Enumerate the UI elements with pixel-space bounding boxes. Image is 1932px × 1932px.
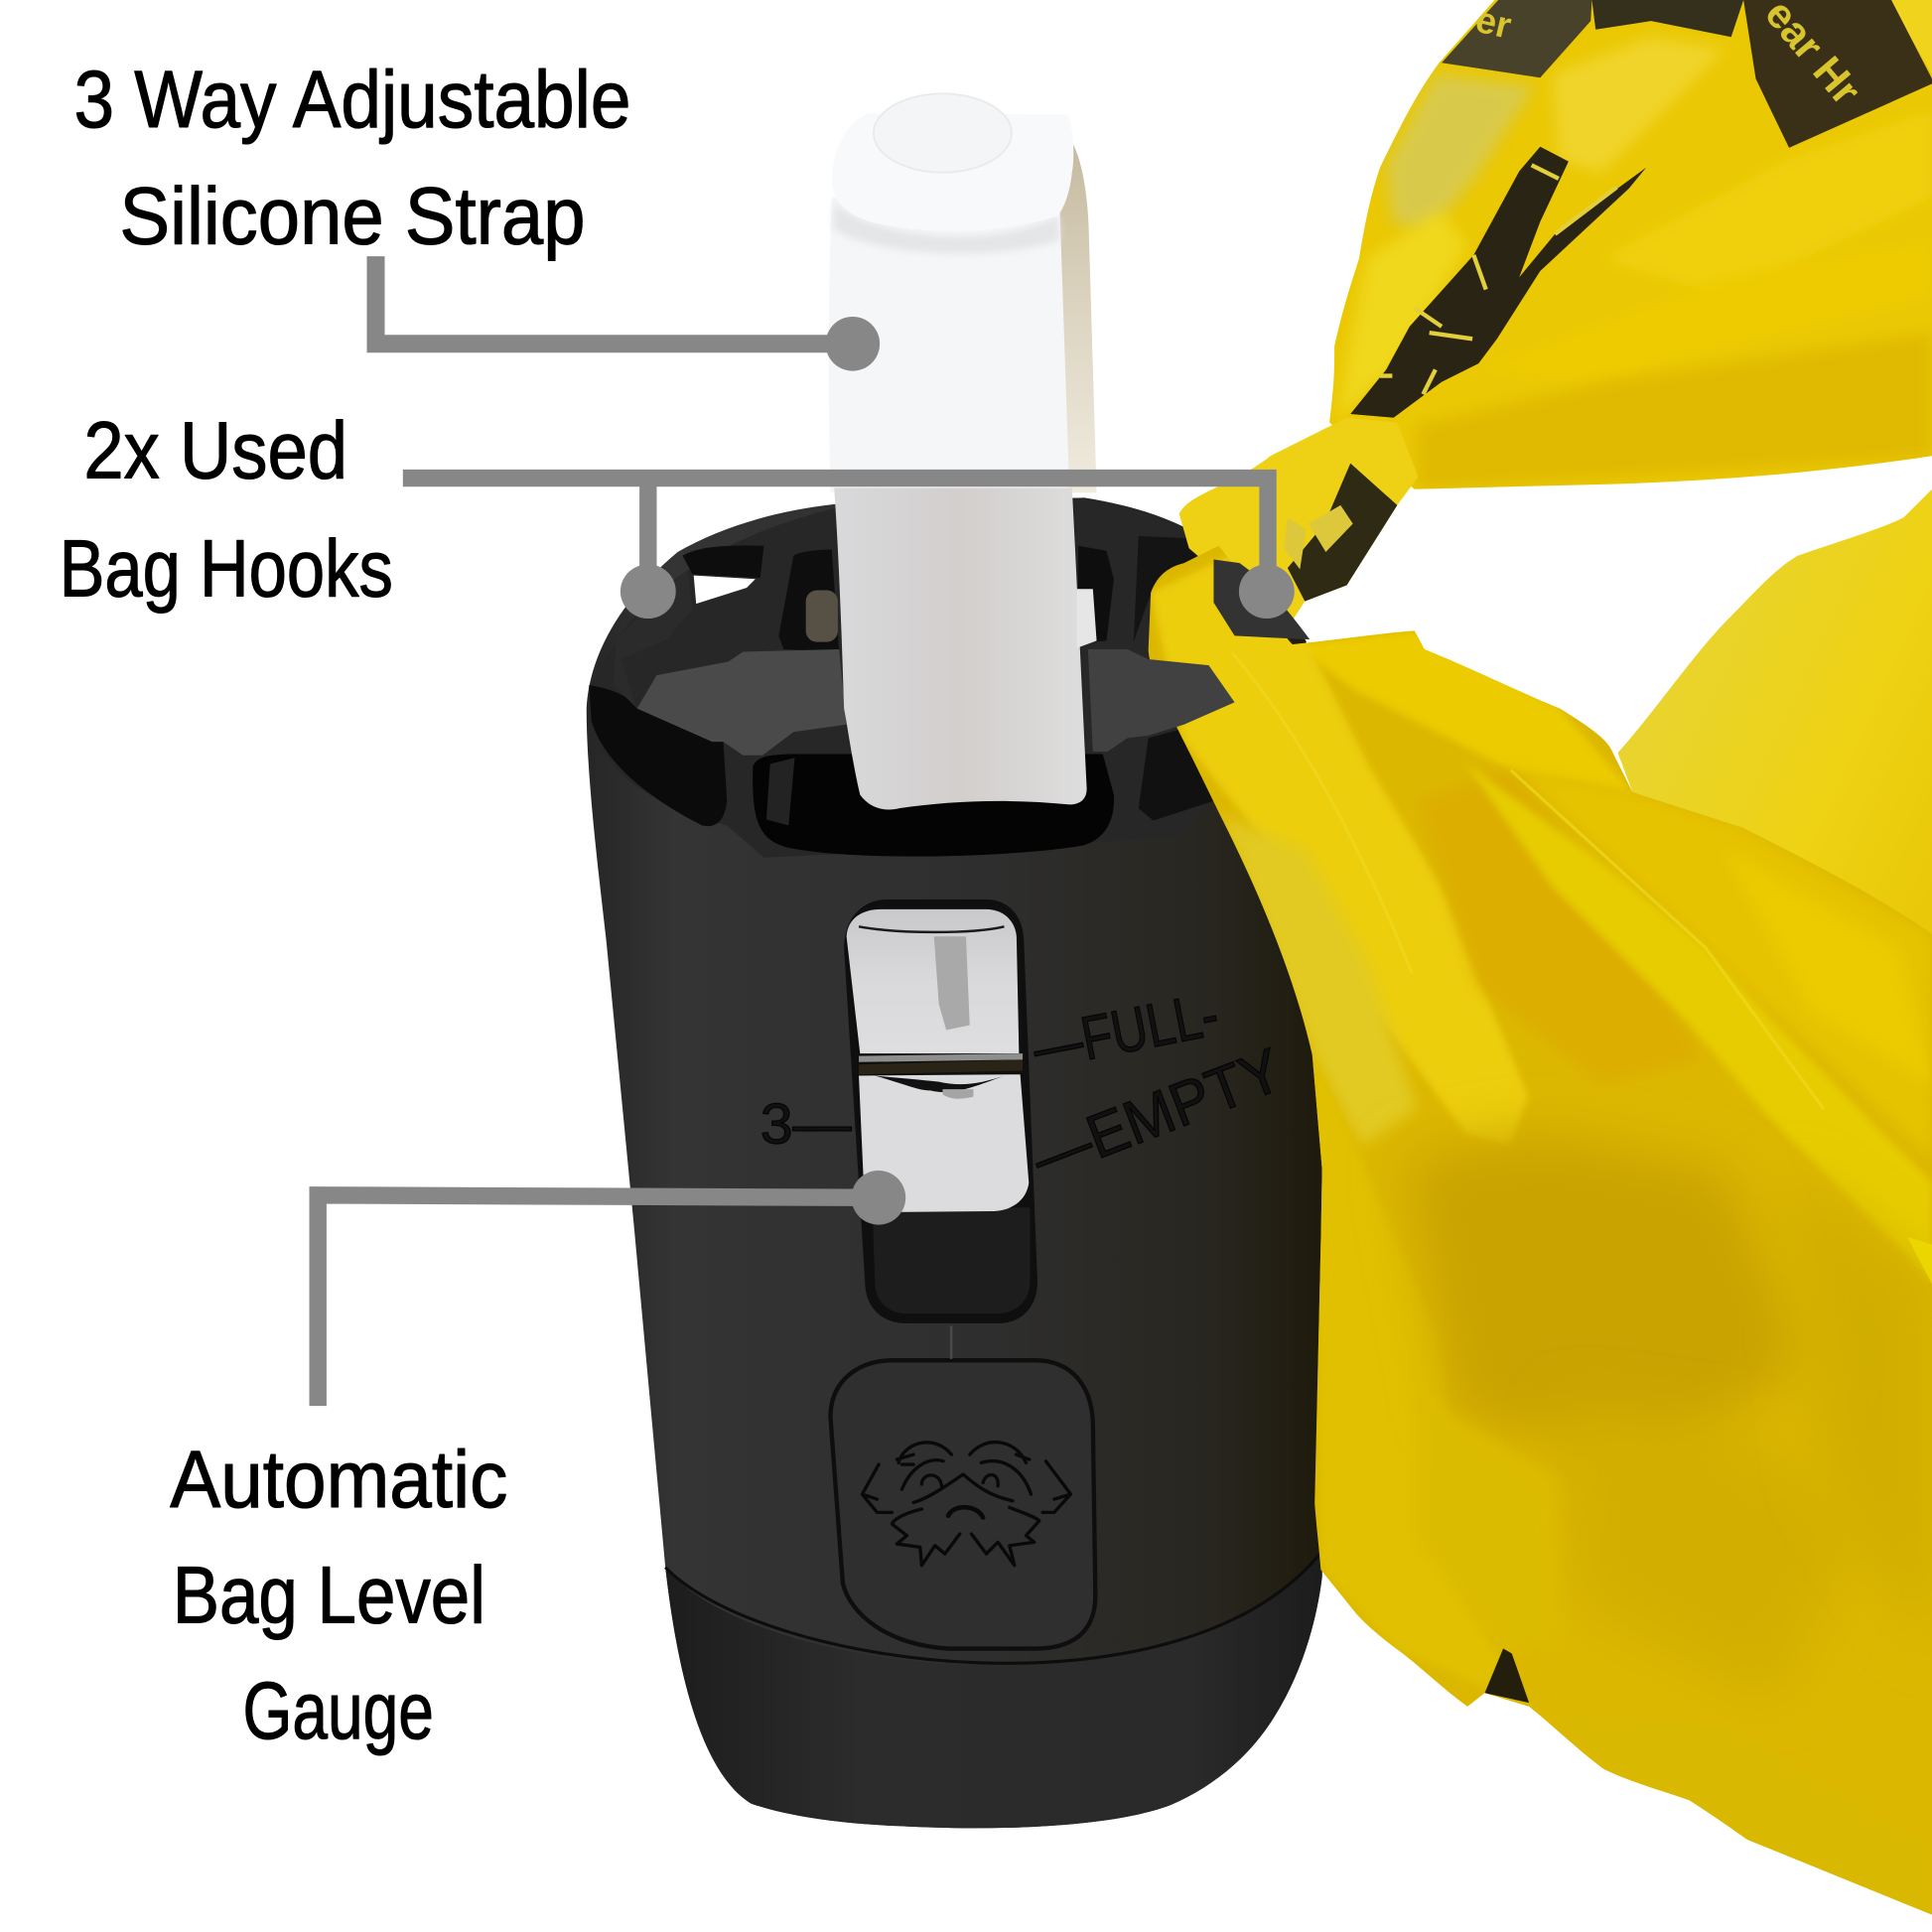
callout: bag hooks connector xyxy=(403,479,1295,619)
silicone strap xyxy=(829,93,1097,810)
button plate xyxy=(830,1360,1095,1649)
hook and cross arm over the bag xyxy=(1088,559,1310,752)
label: 2x used bag hooks xyxy=(60,406,393,615)
callout: level gauge connector xyxy=(318,1171,905,1406)
mark: empty: —EMPTY xyxy=(1023,1035,1292,1193)
front slot xyxy=(753,755,1114,857)
mirror divider xyxy=(859,1053,1023,1062)
upper bag folds xyxy=(1337,0,1932,490)
label: automatic bag level gauge: Bag Level xyxy=(173,1550,485,1640)
cross right xyxy=(1088,649,1235,752)
mirror divider brass xyxy=(859,1059,1023,1074)
see-through gap in hook xyxy=(694,576,756,604)
label: automatic bag level gauge: Gauge xyxy=(242,1666,434,1756)
strap head shadow xyxy=(833,203,1059,254)
yellow bag, upper tied section xyxy=(1329,0,1932,490)
top slot left upper xyxy=(683,546,763,578)
label: 3 way adjustable silicone strap xyxy=(73,55,630,262)
strap side highlight xyxy=(1077,589,1097,648)
icon: dog face xyxy=(862,1443,1070,1566)
top slot inner right xyxy=(1078,546,1114,643)
bag level gauge xyxy=(760,899,1292,1323)
top slot inner left xyxy=(778,550,839,652)
strap upper band xyxy=(829,198,1069,492)
bag folds xyxy=(1151,554,1932,1915)
right lower recess xyxy=(1139,728,1213,821)
label: 3 way adjustable silicone strap: Silicone Strap xyxy=(119,172,586,262)
mirror upper edge shadow xyxy=(859,926,1004,932)
left hook xyxy=(614,569,692,709)
yellow bag, knot xyxy=(1179,418,1418,622)
mirror grey strip xyxy=(934,936,970,1031)
mark: 3: 3— xyxy=(760,1093,853,1157)
mirror lower window xyxy=(859,1074,1029,1212)
mark: full: —FULL- xyxy=(1027,980,1224,1083)
strap head tab xyxy=(832,113,1073,231)
strap back band xyxy=(1058,136,1097,492)
callout: silicone strap connector xyxy=(376,256,880,371)
mirror lower reflection xyxy=(875,1074,1008,1092)
label: 2x used bag hooks: 2x Used xyxy=(83,406,347,496)
gauge slot xyxy=(844,899,1037,1323)
bag fill xyxy=(1149,546,1932,1915)
top slot far right xyxy=(1134,536,1218,642)
strap lower band xyxy=(834,487,1087,810)
base seam xyxy=(665,1552,1322,1663)
dispenser body xyxy=(587,497,1322,1828)
top slot inner left pin xyxy=(806,590,838,642)
strap button xyxy=(874,93,1012,173)
cross left xyxy=(637,649,847,756)
label: automatic bag level gauge: Automatic xyxy=(170,1435,507,1525)
left lower recess xyxy=(589,685,727,826)
mirror lower grey spot xyxy=(942,1089,973,1099)
yellow bag, rear lobe xyxy=(1618,489,1932,1182)
cylinder shell xyxy=(587,497,1322,1828)
front slot inner left wall xyxy=(766,758,794,826)
label: 3 way adjustable silicone strap: 3 Way Adjustable xyxy=(73,55,630,145)
gauge slot inner xyxy=(873,1207,1031,1313)
label: automatic bag level gauge xyxy=(170,1435,507,1756)
yellow bag, main front section xyxy=(1149,546,1932,1915)
seam to gauge xyxy=(950,1325,952,1359)
upper bag body xyxy=(1329,0,1932,489)
mirror upper window xyxy=(847,909,1019,1053)
base cap xyxy=(665,1552,1322,1828)
hook xyxy=(1213,559,1310,639)
top rim recess xyxy=(589,497,1269,858)
bag print marks xyxy=(1350,0,1932,418)
release button with dog logo xyxy=(830,1325,1095,1649)
label: 2x used bag hooks: Bag Hooks xyxy=(60,524,393,615)
